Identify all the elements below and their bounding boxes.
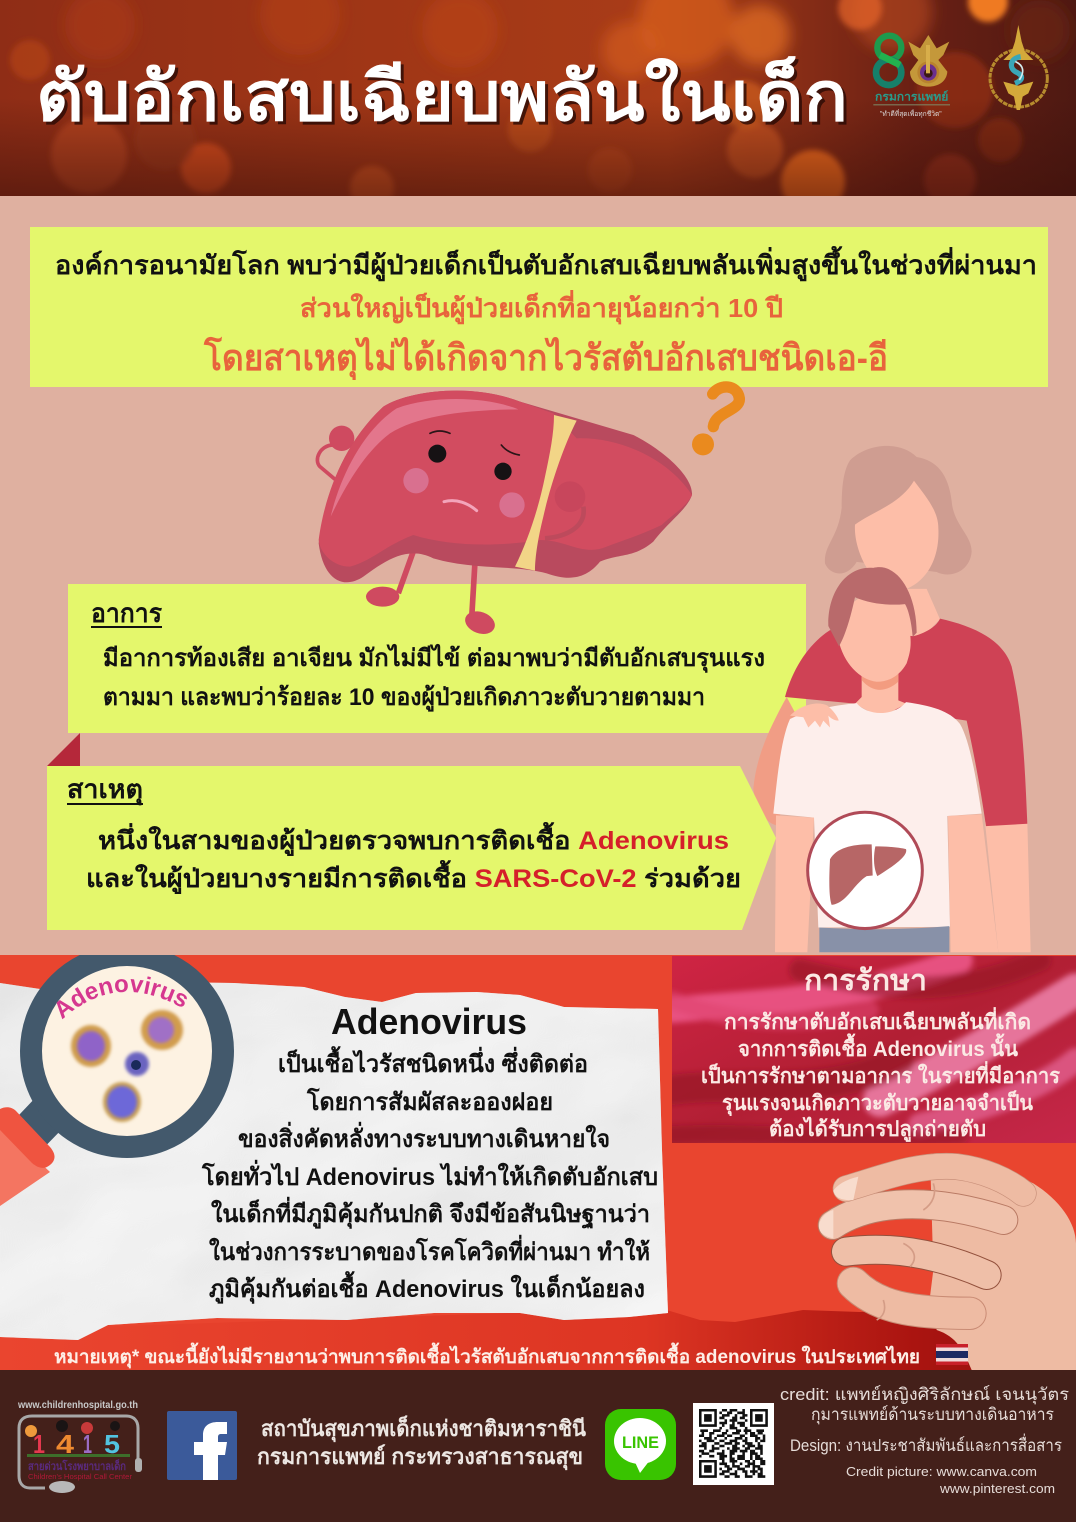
- text: treatment body: [701, 1006, 1061, 1143]
- logo: 1415 call center: 1: [83, 1429, 92, 1459]
- child t-shirt: [773, 702, 982, 928]
- band below the torn paper: [324, 1310, 972, 1370]
- mother hair: [825, 446, 972, 574]
- logo: department of medical services 80 years: "ทำดีที่สุดเพื่อทุกชีวิต": [880, 109, 942, 118]
- footer: [0, 1370, 1076, 1522]
- logo: ministry emblem: [990, 25, 1047, 110]
- liver body: [319, 391, 692, 582]
- child arms: [775, 814, 998, 952]
- text: symptoms line 2: ตามมา และพบว่าร้อยละ 10 ของผู้ป่วยเกิดภาวะตับวายตามมา: [103, 684, 705, 712]
- text block: adenovirus explanation: ภูมิคุ้มกันต่อเชื้อ Adenovirus ในเด็กน้อยลง: [209, 1270, 645, 1305]
- logo: 1415 call center: [17, 1399, 142, 1493]
- magnifier lens ring: [31, 955, 223, 1147]
- illustration: mother and child with liver icon: [753, 446, 1031, 952]
- text block: adenovirus explanation: ในช่วงการระบาดของโรคโควิดที่ผ่านมา ทำให้: [209, 1234, 650, 1266]
- logo: 1415 call center: สายด่วนโรงพยาบาลเด็ก: [28, 1459, 126, 1473]
- text: causes line 2: และในผู้ป่วยบางรายมีการติดเชื้อ SARS-CoV-2 ร่วมด้วย: [86, 859, 741, 895]
- text block: adenovirus explanation: โดยการสัมผัสละอองฝอย: [306, 1087, 553, 1116]
- liver arm up: [317, 445, 335, 479]
- child hair: [828, 567, 917, 646]
- logo: 1415 call center: 1: [33, 1429, 45, 1459]
- child pants: [819, 926, 949, 952]
- text: symptoms line 1: มีอาการท้องเสีย อาเจียน มักไม่มีไข้ ต่อมาพบว่ามีตับอักเสบรุนแรง: [103, 643, 765, 674]
- text: institute name: กรมการแพทย์ กระทรวงสาธารณสุข: [257, 1444, 583, 1471]
- text: causes line 1: หนึ่งในสามของผู้ป่วยตรวจพบการติดเชื้อ Adenovirus: [98, 821, 729, 857]
- text: not caused by hepatitis A-E: โดยสาเหตุไม่ได้เกิดจากไวรัสตับอักเสบชนิดเอ-อี: [203, 336, 888, 381]
- virus 1: [71, 1025, 111, 1067]
- panel: WHO statement: [30, 227, 1048, 387]
- panel: causes: [47, 766, 776, 930]
- mother neck: [883, 589, 940, 646]
- liver face: [403, 431, 525, 518]
- liver ligament: [515, 415, 577, 571]
- credits: Credit picture: www.canva.com: [846, 1465, 1037, 1479]
- text: treatment body: การรักษาตับอักเสบเฉียบพลันที่เกิด: [724, 1006, 1031, 1034]
- mother hand: [790, 703, 839, 727]
- curved label: Adenovirus: [56, 976, 187, 1020]
- credits: กุมารแพทย์ด้านระบบทางเดินอาหาร: [811, 1405, 1054, 1425]
- credits: www.pinterest.com: [939, 1482, 1055, 1496]
- logo: 1415 call center: www.childrenhospital.go.th: [17, 1399, 138, 1411]
- logo: 1415 call center: 5: [104, 1429, 120, 1459]
- heading: adenovirus: Adenovirus: [331, 1001, 527, 1042]
- section: adenovirus and treatment background: [0, 955, 1076, 1370]
- title: ตับอักเสบเฉียบพลันในเด็ก: [39, 59, 851, 138]
- liver right arm: [545, 481, 585, 538]
- icon: line: [605, 1409, 676, 1480]
- illustration: hand tearing paper: [819, 1153, 1076, 1370]
- mother face: [855, 481, 938, 592]
- header banner: [0, 0, 1076, 214]
- liver legs: [366, 547, 498, 638]
- text block: adenovirus explanation: ในเด็กที่มีภูมิคุ้มกันปกติ จึงมีข้อสันนิษฐานว่า: [211, 1196, 650, 1230]
- logo: 1415 call center: 4: [56, 1429, 75, 1459]
- panel: symptoms: [68, 584, 806, 733]
- virus 4: [103, 1082, 141, 1122]
- text: treatment body: รุนแรงจนเกิดภาวะตับวายอาจจำเป็น: [722, 1089, 1034, 1117]
- logo: department of medical services 80 years: กรมการแพทย์: [875, 90, 948, 104]
- heading: causes: สาเหตุ: [67, 774, 143, 806]
- virus 2: [141, 1010, 183, 1050]
- magnifier handle: [0, 1101, 58, 1206]
- torn white paper: [0, 975, 672, 1345]
- text: treatment body: เป็นการรักษาตามอาการ ในรายที่มีอาการ: [701, 1060, 1061, 1088]
- qr code: [693, 1403, 774, 1485]
- child face: [838, 592, 911, 682]
- text: WHO finding: องค์การอนามัยโลก พบว่ามีผู้ป่วยเด็กเป็นตับอักเสบเฉียบพลันเพิ่มสูงขึ้นในช่วงที่ผ่านมา: [55, 245, 1037, 282]
- ribbon fold: [47, 733, 80, 766]
- question mark: [692, 387, 739, 455]
- panel: treatment: [672, 956, 1076, 1143]
- logo: 1415 call center: Children's Hospital Call Center: [28, 1474, 133, 1481]
- icon: line: LINE: [622, 1433, 659, 1452]
- logo: department of medical services 80 years: [873, 35, 950, 118]
- child neck: [855, 673, 907, 717]
- heading: treatment: การรักษา: [804, 965, 927, 997]
- mother right arm: [985, 822, 1031, 952]
- text: institute name: สถาบันสุขภาพเด็กแห่งชาติมหาราชินี: [261, 1414, 586, 1443]
- heading: symptoms: อาการ: [91, 598, 162, 628]
- text block: adenovirus explanation: เป็นเชื้อไวรัสชนิดหนึ่ง ซึ่งติดต่อ: [278, 1045, 588, 1078]
- text: treatment body: ต้องได้รับการปลูกถ่ายตับ: [769, 1116, 986, 1143]
- illustration: sad liver with question mark: [317, 387, 739, 638]
- icon: facebook: [167, 1411, 237, 1480]
- liver main: [319, 391, 692, 567]
- text block: adenovirus explanation: ของสิ่งคัดหลั่งทางระบบทางเดินหายใจ: [238, 1121, 610, 1153]
- credits: [780, 1385, 1069, 1496]
- liver icon badge: [808, 812, 922, 929]
- text: institute name: [257, 1414, 586, 1471]
- text block: adenovirus explanation: [201, 1001, 658, 1305]
- title: ตับอักเสบเฉียบพลันในเด็ก: [36, 56, 848, 135]
- footnote: หมายเหตุ* ขณะนี้ยังไม่มีรายงานว่าพบการติดเชื้อไวรัสตับอักเสบจากการติดเชื้อ adenovirus ในประเทศไทย: [54, 1342, 920, 1369]
- liver highlight: [331, 399, 518, 517]
- text block: adenovirus explanation: โดยทั่วไป Adenovirus ไม่ทำให้เกิดตับอักเสบ: [201, 1159, 658, 1191]
- illustration: magnifier with viruses: [0, 955, 234, 1206]
- mother left arm: [753, 697, 807, 825]
- icon: thai flag: [936, 1344, 968, 1365]
- virus 3: [125, 1052, 149, 1076]
- credits: credit: แพทย์หญิงศิริลักษณ์ เจนนุวัตร: [780, 1385, 1069, 1405]
- mother shirt: [785, 619, 1027, 826]
- text: mostly under 10: ส่วนใหญ่เป็นผู้ป่วยเด็กที่อายุน้อยกว่า 10 ปี: [300, 289, 783, 325]
- text: treatment body: จากการติดเชื้อ Adenovirus นั้น: [738, 1033, 1019, 1061]
